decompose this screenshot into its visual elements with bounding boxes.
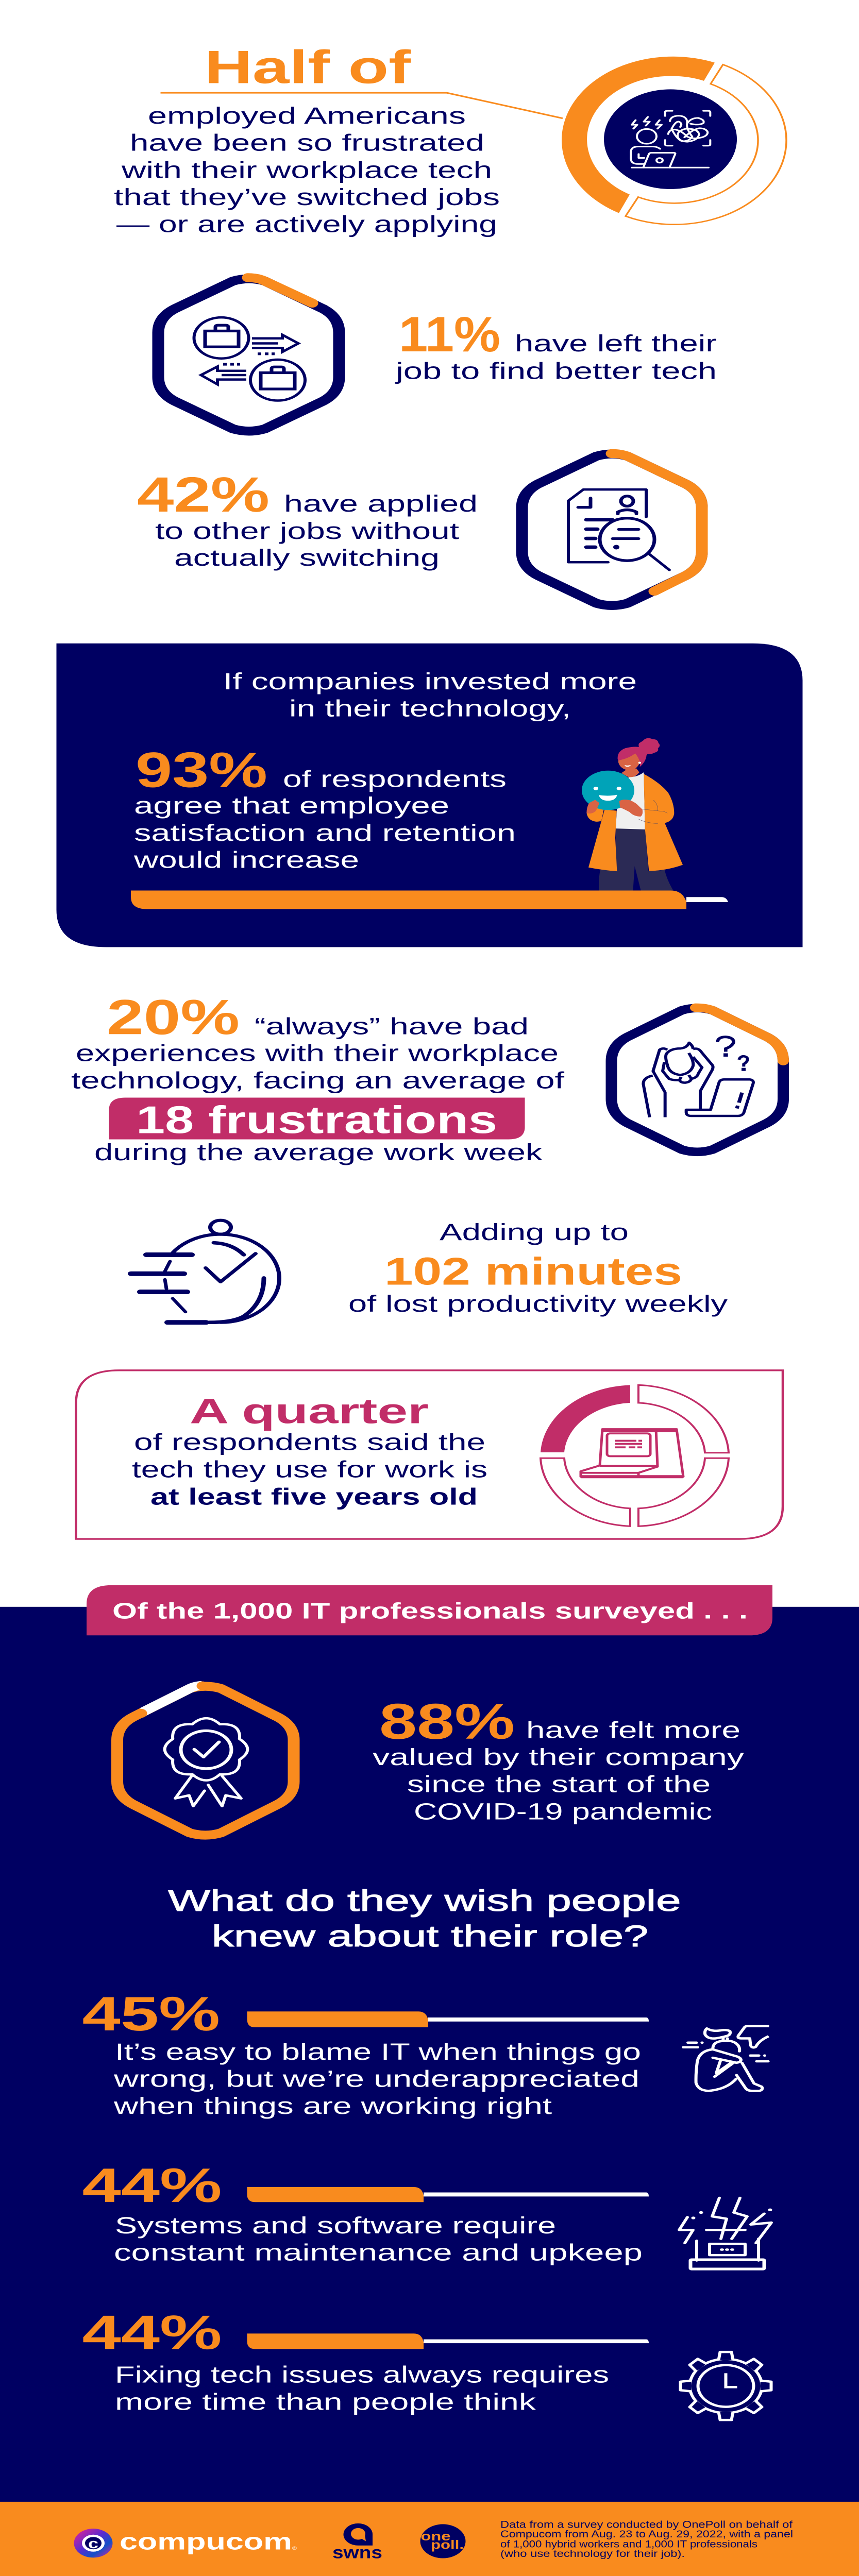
stat: 93% of respondents: satisfaction and retention [134, 820, 516, 846]
stat: 42% applied to other jobs: actually switching [174, 545, 440, 571]
icon: hexagon with stressed person at laptop [611, 1008, 783, 1152]
stat row: 44% fixing tech issues [82, 2306, 649, 2415]
banner: Of the 1,000 IT professionals surveyed [87, 1585, 772, 1635]
logo: one poll [420, 2524, 466, 2558]
icon: gear with clock [680, 2352, 771, 2420]
connector line [161, 93, 563, 118]
icon: frustrated worker with tangled thoughts [631, 111, 710, 167]
stat: 88% felt more valued: 88% [379, 1693, 515, 1750]
stat: 42% applied to other jobs: 42% [137, 467, 270, 522]
chart: half ring with frustrated worker icon [562, 57, 786, 225]
stat: 93% of respondents: 93% [136, 742, 267, 798]
panel: a quarter of respondents [76, 1370, 783, 1539]
callout: 18 frustrations pill: 18 frustrations [136, 1098, 497, 1142]
stat: 20% always have bad experiences: “always” have bad [255, 1013, 529, 1039]
logo: compucom: compucom [120, 2529, 292, 2555]
text: survey methodology note: Data from a survey conducted by OnePoll on behalf of [500, 2519, 793, 2530]
stat: 88% felt more valued: COVID-19 pandemic [414, 1799, 712, 1825]
stat row: 44% systems and software [82, 2159, 649, 2266]
text block: employed Americans: employed Americans [148, 103, 466, 129]
logo: one poll: poll. [431, 2537, 464, 2552]
stat: 42% applied to other jobs: have applied [284, 491, 478, 517]
heading: What do they wish people knew [168, 1884, 681, 1953]
heading: What do they wish people knew: knew about their role? [212, 1919, 648, 1953]
icon: hexagon with award ribbon [117, 1682, 294, 1835]
stat: 11% left their job [394, 307, 717, 384]
stat: 88% felt more valued: valued by their company [373, 1744, 745, 1770]
stat row: 44% fixing tech issues: Fixing tech issues always requires [115, 2362, 609, 2388]
stat: adding up to 102 minutes [348, 1219, 728, 1317]
logo: compucom: c [88, 2535, 98, 2551]
bar: 93% orange progress bar [131, 890, 728, 909]
text block: employed Americans: have been so frustrated [130, 130, 484, 156]
stat row: 44% fixing tech issues: 44% [82, 2306, 222, 2360]
text: A quarter: A quarter [190, 1392, 429, 1431]
stat row: 45% easy to blame IT: when things are working right [113, 2093, 552, 2119]
stat row: 45% easy to blame IT: wrong, but we’re underappreciated [113, 2066, 639, 2092]
text block: employed Americans: that they’ve switched jobs [114, 184, 500, 210]
text: A quarter: at least five years old [150, 1484, 478, 1510]
icon: person sitting dejected [683, 2026, 769, 2091]
heading: Half of: Half of [205, 41, 411, 93]
stat row: 45% easy to blame IT [82, 1987, 649, 2119]
bar: 45 percent [247, 2011, 649, 2027]
stat row: 44% fixing tech issues: more time than people think [115, 2389, 536, 2415]
stat: 88% felt more valued: have felt more [526, 1718, 740, 1743]
section: IT professionals navy background [0, 1607, 859, 2502]
text: survey methodology note: Compucom from Aug. 23 to Aug. 29, 2022, with a panel [500, 2528, 793, 2539]
stat: 93% of respondents: of respondents [283, 766, 507, 792]
stat: 20% always have bad experiences: 20% [107, 990, 240, 1045]
logo: compucom [74, 2529, 297, 2557]
icon: laptop with lightning bolts [679, 2198, 771, 2269]
stat: 20% always have bad experiences: during the average work week [94, 1140, 543, 1165]
stat: adding up to 102 minutes: of lost productivity weekly [348, 1291, 728, 1317]
stat row: 45% easy to blame IT: It’s easy to blame IT when things go [115, 2039, 641, 2065]
stat: 93% of respondents: agree that employee [134, 793, 449, 819]
stat: 20% always have bad experiences [71, 990, 564, 1165]
icon: fast stopwatch with check mark [131, 1221, 279, 1323]
stat: 11% left their job: 11% [399, 307, 500, 362]
footer band [0, 2502, 859, 2576]
logo: one poll: one [420, 2529, 451, 2543]
text: If companies invested more [223, 669, 637, 722]
stat: 88% felt more valued: since the start of the [407, 1772, 711, 1798]
stat row: 44% systems and software: constant maintenance and upkeep [114, 2240, 643, 2266]
stat: adding up to 102 minutes: Adding up to [440, 1219, 629, 1245]
text: A quarter [132, 1392, 487, 1510]
stat row: 45% easy to blame IT: 45% [82, 1987, 220, 2041]
stat: 20% always have bad experiences: experiences with their workplace [76, 1041, 559, 1066]
text block: employed Americans: with their workplace tech [121, 158, 492, 183]
illustration: woman holding smiley face [582, 738, 683, 891]
stat: 11% left their job: job to find better tech [394, 359, 717, 384]
text: If companies invested more: in their technology, [289, 696, 571, 722]
text: A quarter: of respondents said the [134, 1430, 485, 1455]
text: survey methodology note [500, 2519, 793, 2559]
stat: 42% applied to other jobs: to other jobs without [155, 518, 459, 544]
text block: employed Americans: — or are actively applying [116, 211, 497, 238]
banner: Of the 1,000 IT professionals surveyed: Of the 1,000 IT professionals surveyed . . . [112, 1599, 748, 1623]
heading: What do they wish people knew: What do they wish people [168, 1884, 681, 1918]
text: survey methodology note: (who use technology for their job). [500, 2548, 685, 2559]
bar: 44 percent maintenance [247, 2187, 649, 2202]
stat: 93% of respondents: would increase [133, 848, 359, 873]
chart: quarter ring with old computer icon [541, 1385, 729, 1526]
icon: hexagon with job switching briefcases [158, 278, 339, 431]
logo: compucom: ® [292, 2546, 297, 2551]
panel: investing in technology [57, 643, 803, 947]
stat row: 44% systems and software: 44% [82, 2159, 222, 2212]
stat row: 44% systems and software: Systems and software require [115, 2213, 556, 2239]
icon: hexagon with resume and magnifier [522, 453, 702, 605]
logo: swns: swns [332, 2544, 382, 2562]
text: If companies invested more: If companies invested more [223, 669, 637, 694]
logo: swns [332, 2523, 382, 2562]
stat: 88% felt more valued [373, 1693, 745, 1825]
stat: adding up to 102 minutes: 102 minutes [384, 1250, 682, 1293]
stat: 42% applied to other jobs [137, 467, 478, 571]
icon: old computer [581, 1429, 683, 1477]
bar: 44 percent time [247, 2333, 649, 2349]
stat: 11% left their job: have left their [515, 331, 717, 357]
text: A quarter: tech they use for work is [132, 1457, 487, 1483]
text block: employed Americans [114, 103, 500, 238]
text: survey methodology note: of 1,000 hybrid workers and 1,000 IT professionals [500, 2538, 757, 2550]
stat: 20% always have bad experiences: technology, facing an average of [71, 1067, 564, 1094]
stat: 93% of respondents [133, 742, 516, 873]
